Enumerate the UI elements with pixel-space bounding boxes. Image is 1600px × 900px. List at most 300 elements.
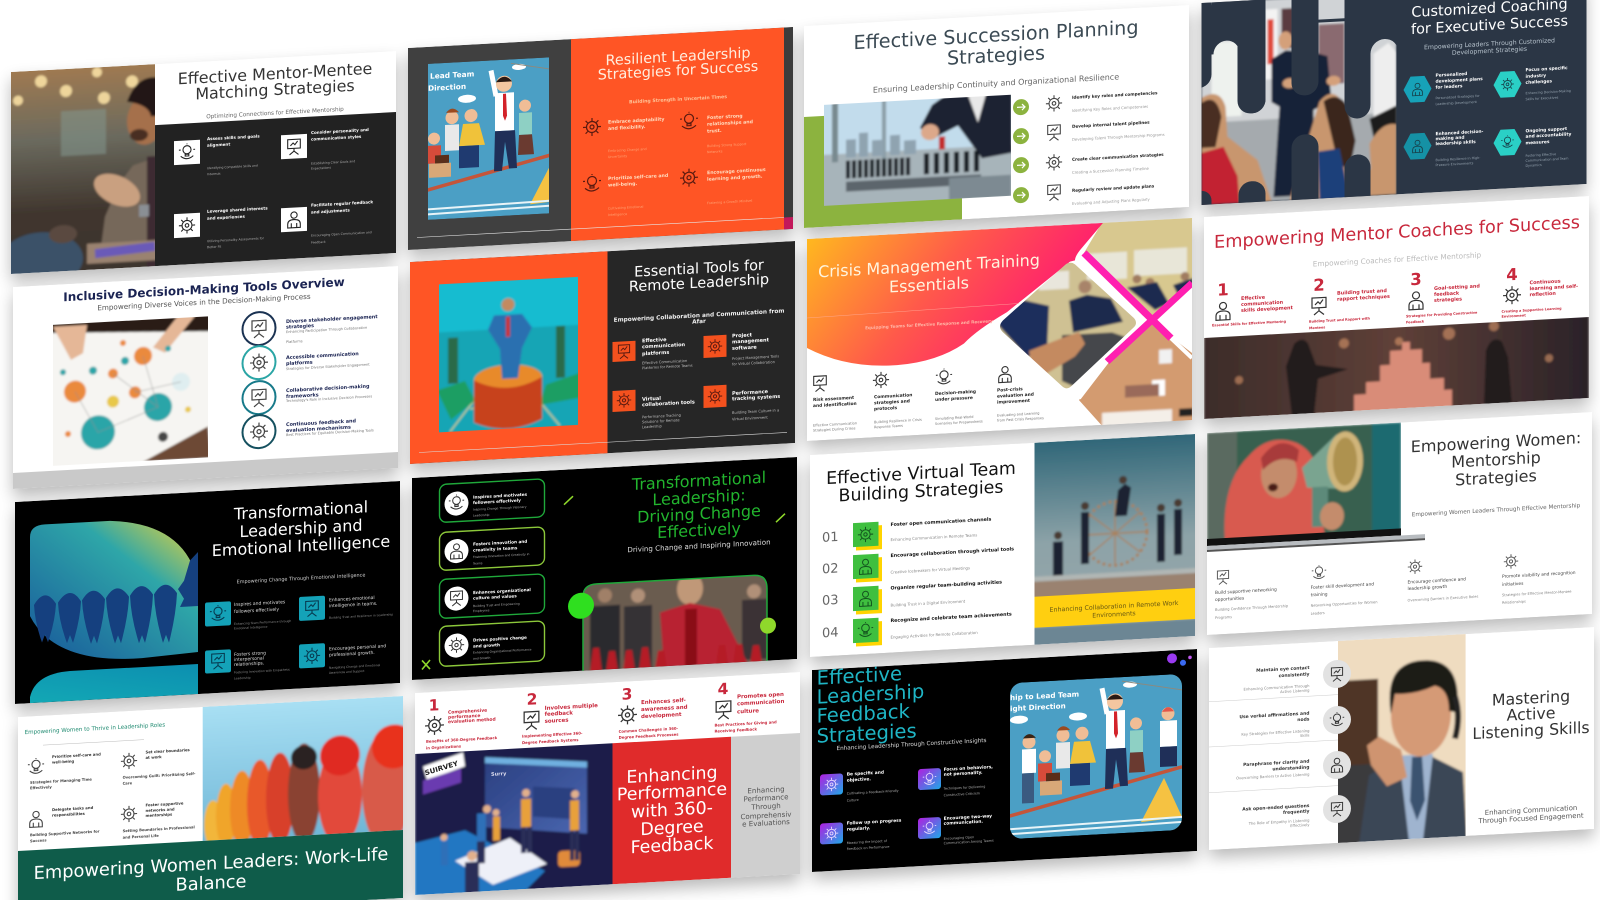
item text: management — [732, 337, 770, 345]
photo: business people with network globe — [1034, 434, 1195, 645]
item subtext: Solutions for Remote — [642, 418, 680, 424]
item subtext — [847, 784, 994, 851]
side panel text: Through — [750, 801, 781, 811]
item subtext: Strategies During Crises — [813, 426, 856, 433]
panel: Resilient Leadership Strategies for Success — [408, 27, 793, 250]
title: Performance — [617, 779, 727, 805]
arrows — [1017, 104, 1025, 198]
item subtext — [813, 411, 1044, 433]
item text: Identify key roles and competencies — [1072, 90, 1158, 100]
item text: feedback — [1434, 291, 1460, 298]
item subtext: and Personal Life — [123, 834, 159, 840]
item text: Foster strong — [707, 113, 743, 121]
item subtext: Teams — [472, 561, 483, 566]
item subtext: Personalized Strategies for — [1436, 94, 1480, 100]
item text: followers effectively — [473, 497, 521, 505]
title: Crisis Management Training — [818, 250, 1040, 281]
item subtext: Mentees — [1309, 325, 1325, 330]
item text: and flexibility. — [608, 124, 646, 132]
dark content panel — [155, 112, 396, 266]
item subtext: The Role of Empathy in Listening — [1248, 819, 1309, 826]
item text: regularly. — [847, 825, 871, 832]
title: Enhancing — [626, 763, 718, 788]
item subtext: Identifying Key Roles and Competencies — [1072, 104, 1148, 113]
title: Leadership and — [239, 515, 363, 541]
item text: protocols — [874, 405, 898, 412]
icon tiles — [174, 134, 307, 238]
title: Building Strategies — [839, 477, 1003, 506]
item subtext: Creating a Supportive Learning — [1501, 306, 1562, 314]
subtitle: Building Strength in Uncertain Times — [629, 94, 727, 105]
item subtext: Measuring the Impact of — [847, 839, 888, 845]
icons — [814, 365, 1011, 393]
item text: Ongoing support — [1526, 126, 1567, 134]
item text — [608, 110, 766, 188]
item text: nods — [1297, 716, 1310, 723]
item subtext: Networks — [707, 149, 723, 154]
item subtext: Effective Communication — [813, 421, 857, 428]
item subtext: Cultivating a Feedback-Friendly — [847, 789, 899, 796]
photo: diamond meeting room — [997, 250, 1147, 399]
item subtext: Expectations — [311, 166, 331, 171]
item subtext: Communication Among Teams — [944, 839, 994, 845]
panel: Empowering Women: Mentorship Strategies — [1207, 412, 1592, 635]
item text: Encourages personal and — [329, 643, 386, 652]
title: Leadership — [817, 679, 924, 708]
item subtext: Fostering a Growth Mindset — [707, 199, 753, 205]
title: Empowering Women Leaders: Work-Life — [34, 843, 388, 884]
icon tiles — [205, 596, 325, 674]
item subtext — [472, 504, 532, 661]
item text: well-being. — [608, 180, 637, 188]
panel: Customized Coaching for Executive Success — [1202, 0, 1586, 205]
icons — [1046, 95, 1062, 201]
item text: Foster open communication channels — [890, 517, 992, 528]
photo: glowing tower between two figures — [1204, 317, 1589, 419]
item text: reflection — [1530, 291, 1556, 298]
item subtext: Simulating Real-World — [935, 415, 974, 421]
title: Effective — [817, 662, 902, 689]
item text: relationships. — [234, 660, 264, 668]
item subtext: Essential Skills for Effective Mentoring — [1212, 320, 1287, 328]
title: for Executive Success — [1411, 14, 1568, 38]
item text: at work — [145, 754, 162, 760]
item subtext: Creative Icebreakers for Virtual Meetings — [890, 565, 970, 575]
photo: hands sketching a mind map — [53, 316, 208, 466]
item text: Set clear boundaries — [145, 747, 191, 754]
title: Strategies — [1455, 466, 1537, 489]
subtitle: Empowering Leaders Through Customized — [1424, 37, 1555, 51]
item text: Drives positive change — [473, 634, 527, 642]
item subtext: Navigating Change and Emotional — [329, 663, 380, 670]
item text: Decision-making — [935, 388, 976, 397]
item subtext: Culture — [847, 798, 859, 803]
item subtext: Strategies for Diverse Stakeholder Engagement — [286, 363, 370, 371]
item subtext: Building Trust and Resilience in Leadership — [329, 612, 393, 620]
item subtext: Fostering Innovation with Empathetic — [234, 667, 290, 675]
item text — [847, 763, 993, 832]
item subtext: in Organizations — [426, 743, 462, 750]
step numbers: 3 — [622, 685, 632, 704]
item text: mentorships — [145, 811, 173, 818]
item text: Enhances emotional — [329, 594, 375, 603]
illustration: survey screen and team: SUIRVEY — [424, 759, 460, 777]
item subtext: Active Listening — [1280, 689, 1309, 694]
title: Feedback — [817, 699, 911, 727]
divider line — [419, 432, 787, 453]
item subtext: Programs — [1215, 615, 1232, 620]
white icon discs — [444, 491, 468, 658]
panel: Effective Mentor-Mentee Matching Strategies — [11, 52, 396, 274]
laptop base — [1207, 527, 1425, 552]
item text: interpersonal — [234, 655, 264, 663]
title: Effective Virtual Team — [826, 459, 1016, 489]
tile glyphs — [210, 599, 320, 669]
subtitle: Development Strategies — [1452, 45, 1527, 56]
item text: Post-crisis — [997, 386, 1023, 393]
item subtext: Response Teams — [874, 424, 903, 429]
subtitle: Enhancing Communication — [1485, 804, 1577, 817]
step numbers: 4 — [1506, 265, 1518, 285]
item text: and accountability — [1526, 131, 1571, 139]
item subtext: Establishing Clear Goals and — [311, 159, 355, 166]
item text: Ask open-ended questions — [1242, 803, 1310, 812]
subtitle: Empowering Change Through Emotional Intelligence — [237, 572, 365, 585]
item subtext — [30, 772, 196, 845]
item text: Encourage two-way — [944, 813, 992, 821]
item text: platforms — [642, 350, 669, 357]
item text: intelligence in teams. — [329, 600, 377, 609]
item text: alignment — [207, 141, 230, 147]
hexagon glyphs — [1413, 78, 1514, 153]
item text: Maintain eye contact — [1256, 664, 1310, 673]
subtitle: Empowering Collaboration and Communication from — [614, 309, 784, 324]
item subtext: Leadership — [473, 513, 490, 518]
item subtext: Utilizing Personality Assessments for — [207, 236, 265, 243]
framed photo: leader and chess pieces — [580, 568, 770, 676]
item text: Prioritize self-care and — [52, 751, 101, 759]
item text: leadership skills — [1436, 139, 1476, 147]
item text: platforms — [286, 360, 313, 367]
item subtext: Techniques for Delivering — [943, 785, 985, 791]
item text: for leaders — [1436, 83, 1463, 90]
side panel text: e Evaluations — [742, 817, 790, 828]
item subtext: Strategies for Managing Time — [30, 777, 92, 785]
title: Strategies for Success — [598, 59, 758, 84]
item text: Personalized — [1436, 71, 1467, 78]
caption: Environments — [1092, 610, 1136, 619]
cartoon illustration — [1010, 674, 1182, 838]
item text: making and — [1436, 134, 1464, 142]
item text: Focus on specific — [1526, 65, 1568, 73]
item subtext: Success — [30, 838, 47, 843]
item subtext — [1212, 304, 1562, 336]
item subtext — [207, 157, 372, 250]
item text: learning and growth. — [707, 173, 763, 182]
icons — [1216, 286, 1521, 320]
title: Effective Succession Planning — [853, 15, 1139, 54]
ring icons — [242, 311, 276, 449]
divider — [43, 740, 144, 745]
item text: Diverse stakeholder engagement — [286, 314, 378, 325]
item subtext: Communication and Team — [1526, 157, 1568, 163]
item text: challenges — [1526, 78, 1552, 85]
item text: under pressure — [935, 394, 973, 403]
sticky glyphs — [858, 526, 873, 637]
item subtext: Overcoming Guilt: Prioritizing Self- — [123, 772, 196, 780]
item text: followers effectively — [234, 606, 279, 615]
panel: Enhancing Performance with 360-Degree Feedback — [415, 672, 800, 897]
item text — [207, 126, 373, 220]
photo: executive placing chess-like figure — [824, 94, 1011, 206]
item text: Foster supportive — [145, 800, 184, 807]
ring glyphs — [250, 320, 268, 441]
icons — [583, 111, 698, 192]
panel: Essential Tools for Remote Leadership — [410, 241, 795, 464]
item subtext: Common Challenges in 360- — [619, 725, 679, 733]
subtitle: Afar — [692, 319, 706, 326]
step numbers — [429, 680, 729, 715]
item text: Involves multiple — [545, 703, 598, 712]
item text: networks and — [145, 806, 175, 813]
item text: Recognize and celebrate team achievements — [890, 611, 1012, 624]
title: Emotional Intelligence — [212, 531, 390, 560]
item text: Promote visibility and recognition — [1502, 569, 1576, 579]
item subtext: from Past Crisis Responses — [997, 416, 1044, 423]
side panel text: Performance — [744, 792, 788, 803]
item subtext: Project Management Tools — [732, 354, 779, 361]
item text: initiatives — [1502, 580, 1524, 587]
item subtext: Overcoming Barriers in Executive Roles — [1408, 595, 1478, 603]
item text: measures — [1526, 139, 1550, 146]
subtitle: Equipping Teams for Effective Response and Recovery — [865, 318, 993, 330]
item text: Inspires and motivates — [473, 491, 528, 499]
item text: Fosters strong — [234, 650, 266, 658]
item subtext: Enhancing Communication Through — [1244, 684, 1310, 692]
item text: Promotes open — [737, 692, 784, 700]
item subtext: Building Trust and Empowering — [473, 602, 520, 608]
yellow caption band — [1034, 588, 1195, 628]
item text: Organize regular team-building activities — [890, 580, 1002, 592]
photo: leader figure on podium — [439, 276, 578, 432]
item text: Effective — [1241, 295, 1266, 302]
item text: Enhanced decision- — [1436, 128, 1484, 137]
subtitle: Through Focused Engagement — [1477, 812, 1584, 825]
list item frames — [440, 479, 544, 667]
item subtext: Constructive Criticism — [944, 791, 980, 797]
item subtext: Building Resilience in High- — [1436, 156, 1481, 162]
item subtext — [1215, 589, 1572, 621]
item subtext: Enhancing Communication in Remote Teams — [890, 532, 977, 542]
item text: communication styles — [311, 133, 362, 141]
cartoon illustration: Lead Team — [430, 69, 475, 80]
item subtext: Strategies for Effective Mentor-Mentee — [1502, 590, 1572, 597]
item text: Paraphrase for clarity and — [1243, 758, 1310, 768]
item subtext: Cultivating Emotional — [608, 205, 644, 211]
list numbers: 02 — [822, 561, 839, 577]
item text: evaluation method — [448, 716, 496, 725]
item text: Collaborative decision-making — [286, 384, 370, 394]
step numbers: 2 — [1313, 275, 1325, 295]
icons — [425, 700, 731, 735]
green title band — [18, 830, 403, 900]
item text: Continuous — [1530, 279, 1561, 286]
item subtext: Virtual Environment — [732, 415, 768, 421]
item subtext: Strategies for Providing Constructive — [1406, 311, 1478, 318]
item text: awareness and — [641, 705, 688, 713]
title: Balance — [176, 871, 246, 895]
item subtext: Intelligence — [608, 212, 627, 217]
list numbers: 03 — [822, 593, 839, 609]
item text: culture — [737, 708, 759, 715]
item subtext: Degree Feedback Processes — [619, 731, 679, 739]
item text: tracking systems — [732, 394, 780, 402]
item subtext: Dynamics — [1526, 163, 1542, 168]
item subtext: Environment — [1501, 313, 1526, 319]
photo: man in conversation at cafe — [11, 64, 155, 274]
item subtext: Feedback — [311, 240, 326, 245]
item subtext: Building Confidence Through Mentorship — [1215, 604, 1289, 612]
item subtext: Feedback on Performance — [847, 845, 889, 851]
step numbers — [1217, 264, 1518, 300]
title: Inclusive Decision-Making Tools Overview — [63, 275, 345, 304]
item text: evaluation and — [997, 391, 1034, 399]
item subtext: Skills for Executives — [1526, 96, 1559, 101]
item text: skills development — [1241, 305, 1294, 314]
item text — [448, 691, 784, 731]
title: Resilient Leadership — [605, 45, 751, 69]
arrow badges — [1013, 99, 1029, 204]
item text — [642, 331, 780, 408]
sticky note icons — [853, 522, 882, 647]
item subtext: Emotional Intelligence — [234, 625, 268, 631]
title: Essential Tools for — [634, 258, 764, 281]
photo: upper room wall — [1077, 214, 1197, 330]
gradient title blob — [807, 223, 1103, 370]
item subtext: Evaluating and Adjusting Plans Regularly — [1072, 197, 1150, 206]
item subtext: Building Resilience in Crisis — [874, 418, 922, 424]
subtitle rule — [807, 303, 1019, 318]
item text: Regularly review and update plans — [1072, 183, 1155, 193]
item text — [286, 314, 378, 434]
item subtext: Developing Talent Through Mentorship Programs — [1072, 132, 1165, 142]
decorative bubbles — [1167, 652, 1192, 667]
list numbers: 01 — [822, 530, 839, 546]
item text: frameworks — [286, 392, 319, 400]
item subtext: Identifying Compatible Skills and — [207, 164, 258, 170]
item text: consistently — [1279, 671, 1310, 679]
icon tiles — [612, 335, 726, 413]
title: Transformational — [631, 467, 766, 494]
row dividers — [1209, 695, 1338, 793]
item subtext: Creating a Succession Planning Timeline — [1072, 166, 1149, 175]
photo: man with headset thinking — [1338, 634, 1466, 843]
item text: Delegate tasks and — [52, 804, 94, 812]
item text: and identification — [813, 400, 857, 409]
item text: and adjustments — [311, 207, 350, 214]
title: Empowering Mentor Coaches for Success — [1214, 213, 1580, 253]
item subtext: Technology's Role in Inclusive Decision Processes — [285, 394, 372, 403]
item subtext — [285, 325, 374, 437]
item text: Communication — [874, 392, 912, 400]
item text — [1072, 90, 1164, 193]
item text: industry — [1526, 72, 1546, 79]
item text: communication — [1241, 300, 1284, 308]
item subtext: Enhancing Decision-Making — [1526, 89, 1571, 95]
green accent circles — [568, 582, 776, 644]
item text: Comprehensive — [448, 707, 487, 715]
tile glyphs — [825, 771, 936, 841]
item text: understanding — [1272, 764, 1309, 772]
item text: communication. — [944, 818, 983, 826]
item text: Leverage shared interests — [207, 205, 268, 213]
item text — [1436, 64, 1571, 151]
title: with 360- — [631, 798, 713, 823]
item subtext: Building Trust in a Digital Environment — [890, 599, 966, 608]
subtitle: Empowering Diverse Voices in the Decision-Making Process — [97, 292, 311, 312]
cartoon illustration — [428, 58, 549, 220]
side panel text: Enhancing — [747, 784, 785, 795]
item subtext: Building Strong Support — [707, 142, 747, 148]
panel: Crisis Management Training Essentials — [807, 214, 1197, 445]
title: Feedback — [631, 834, 714, 858]
item subtext: Receiving Feedback — [714, 726, 757, 733]
item subtext: Encouraging Open — [944, 835, 974, 841]
illustration: survey screen and team: Surry — [491, 771, 507, 778]
cartoon illustration: Direction — [428, 81, 466, 92]
item text — [1239, 664, 1310, 818]
title: Strategies — [947, 41, 1045, 69]
disc glyphs — [449, 494, 464, 653]
panel: Effective Leadership Feedback Strategies — [812, 645, 1200, 872]
item text: training — [1311, 591, 1328, 598]
item subtext: Effectively — [1290, 823, 1310, 828]
green corner block — [804, 108, 962, 228]
cartoon illustration: ight Direction — [1010, 701, 1066, 713]
item text — [52, 746, 191, 823]
item subtext: Building Trust and Rapport with — [1309, 316, 1371, 324]
lower gradient shape — [30, 664, 198, 703]
white line ends — [1079, 337, 1192, 398]
item text: rapport techniques — [1337, 294, 1390, 303]
subtitle: Ensuring Leadership Continuity and Organizational Resilience — [873, 72, 1119, 95]
title: Matching Strategies — [195, 75, 355, 103]
item text: Prioritize self-care and — [608, 172, 668, 182]
title: Leadership: — [652, 485, 746, 509]
grey footer band — [13, 452, 398, 489]
title: Mastering — [1492, 686, 1570, 709]
item text: performance — [448, 712, 480, 720]
item text — [1215, 569, 1576, 603]
photo: row of sculpted heads — [202, 696, 403, 841]
item text: Goal-setting and — [1434, 283, 1480, 292]
photo: lower table — [1075, 318, 1195, 430]
item subtext: Platforms — [286, 339, 303, 344]
title: Empowering Women: — [1411, 428, 1581, 456]
step numbers: 2 — [527, 690, 537, 709]
item text: Enhances self- — [641, 698, 686, 706]
item subtext: Inspiring Change Through Visionary — [473, 505, 527, 512]
item text: collaboration tools — [642, 399, 695, 408]
list numbers — [822, 530, 839, 641]
item subtext: Uncertainty — [608, 154, 627, 159]
item text: development — [641, 712, 682, 720]
item subtext: Implementing Effective 360- — [522, 730, 583, 738]
subtitle: Optimizing Connections for Effective Mentorship — [206, 107, 344, 120]
item subtext: Leadership Development — [1436, 100, 1478, 106]
panel: Effective Succession Planning Strategies — [804, 5, 1189, 228]
item subtext: Interests — [207, 172, 221, 176]
